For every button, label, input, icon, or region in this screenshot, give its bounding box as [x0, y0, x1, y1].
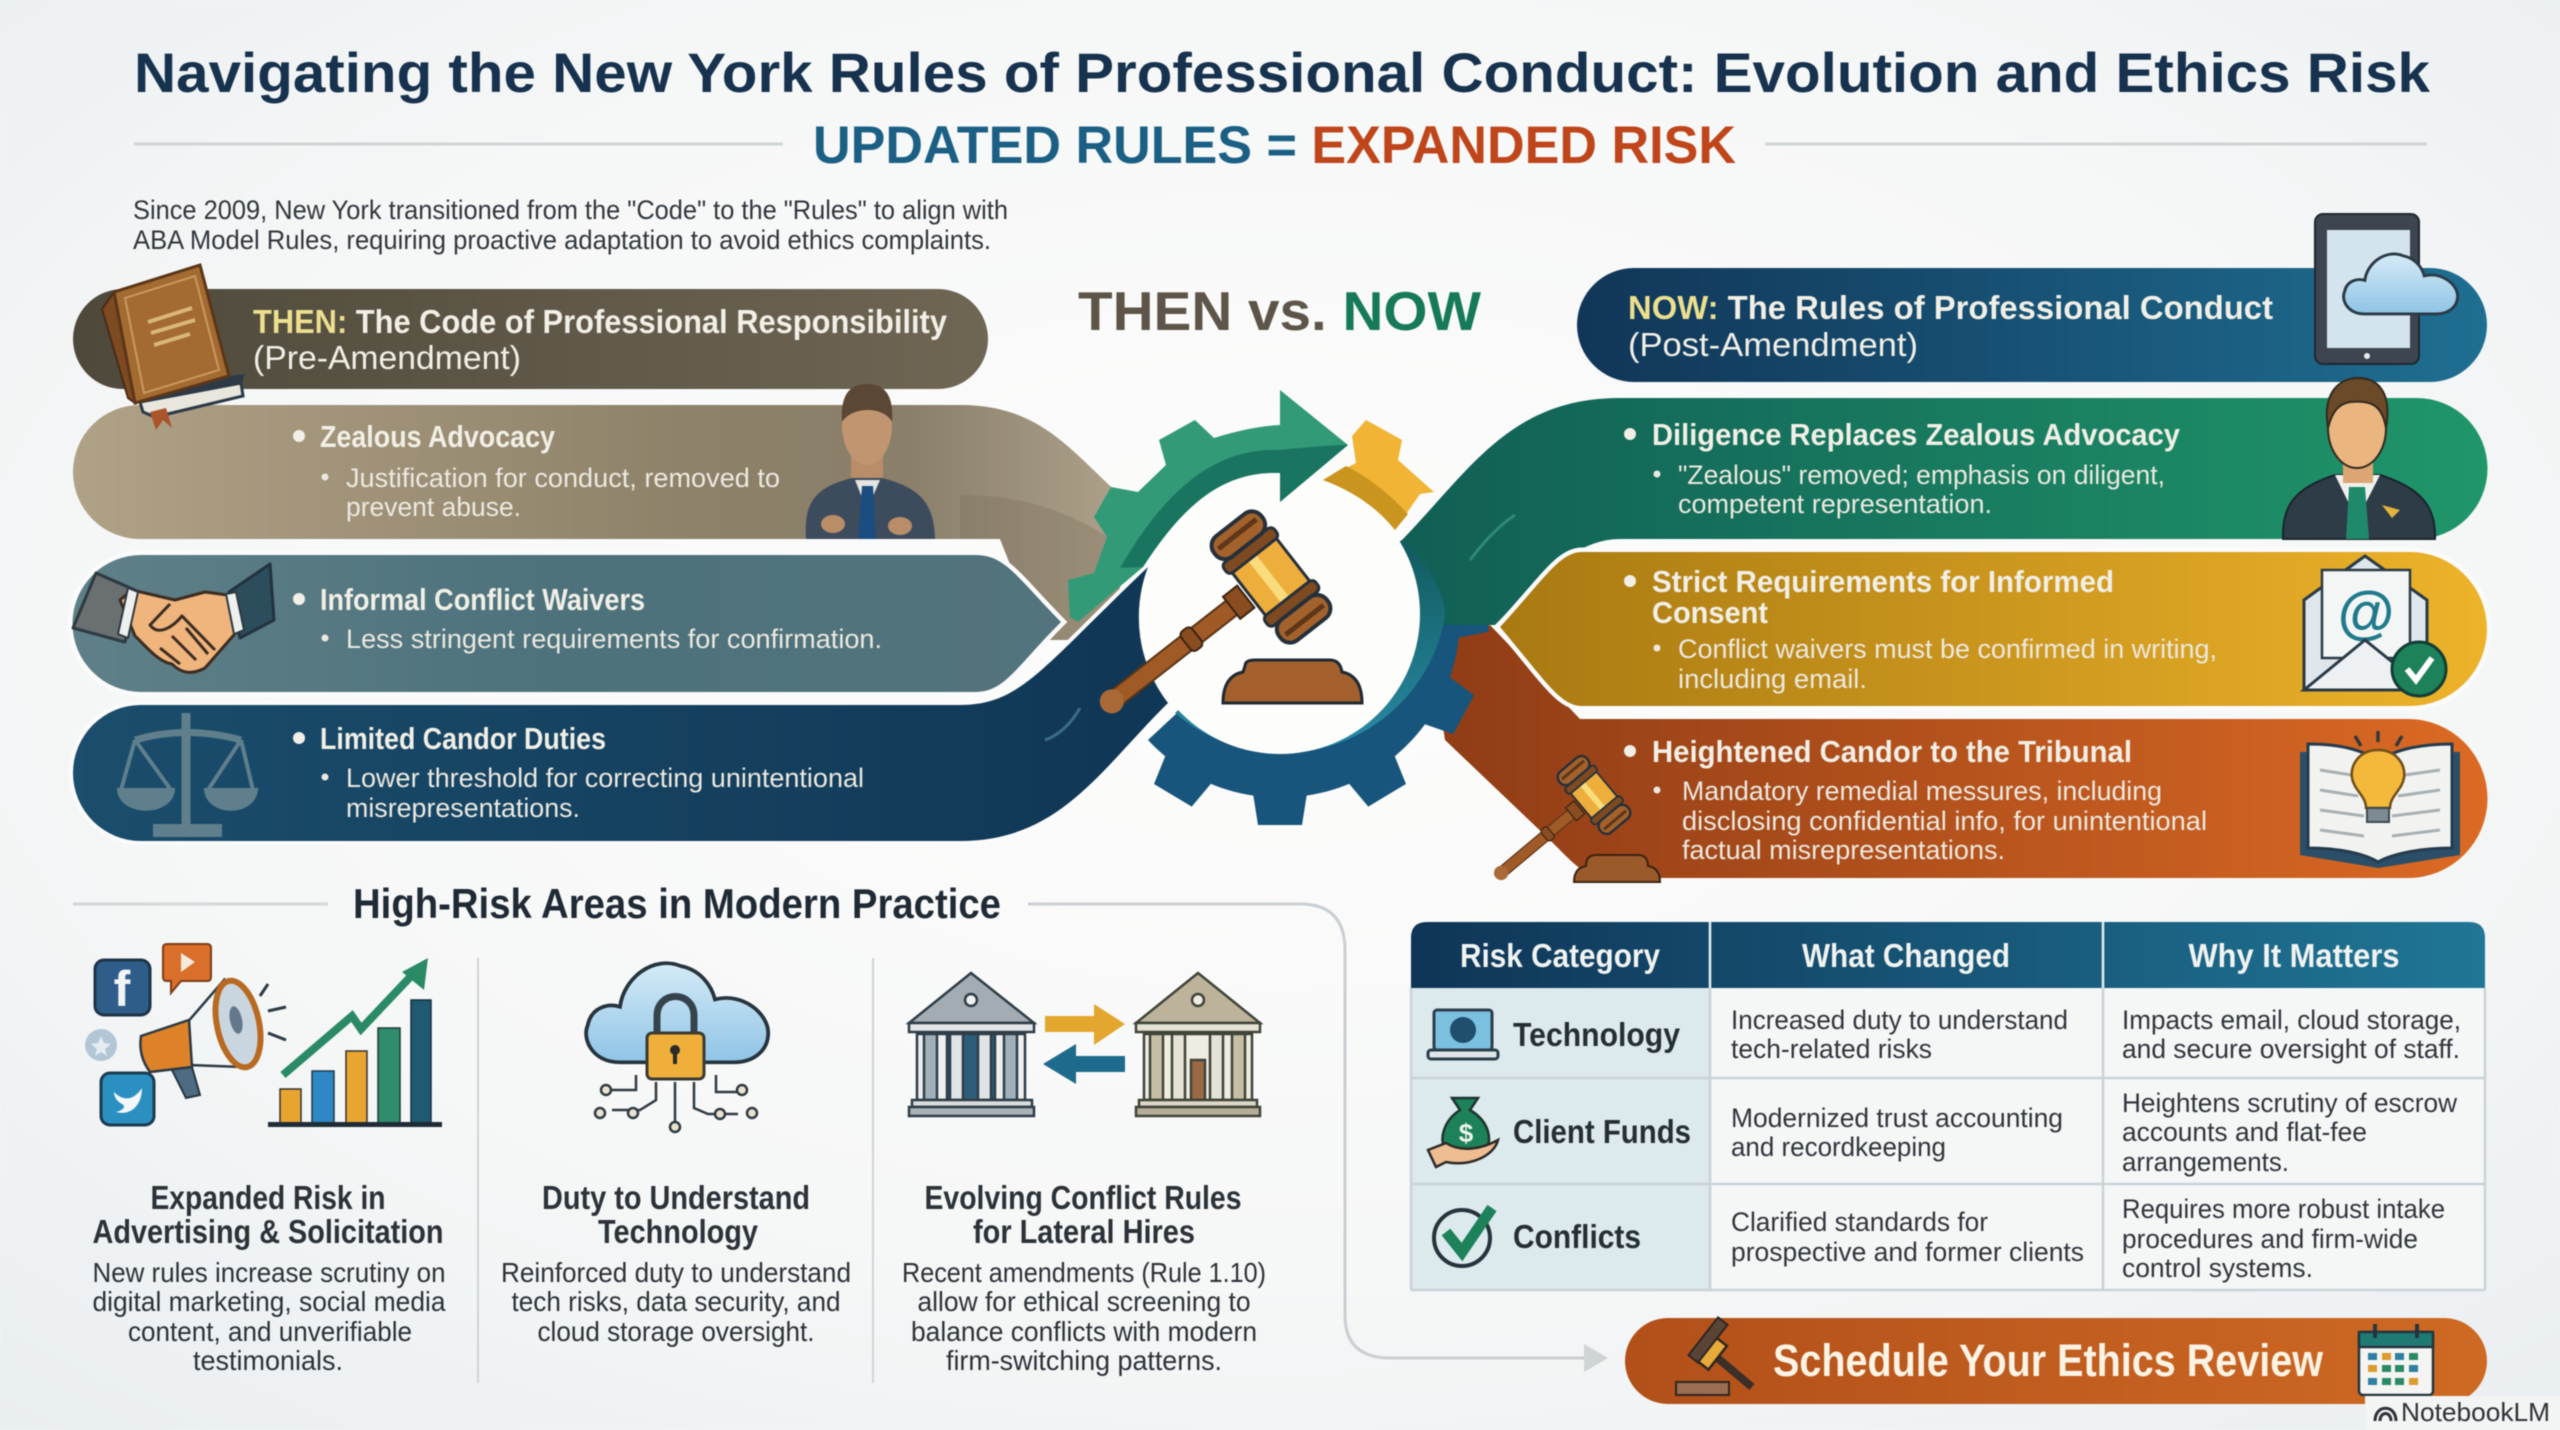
- row: conflicts: prospective and former clients: [1731, 1237, 2084, 1267]
- diligence text: competent representation.: [1678, 489, 1992, 519]
- icon: attorney now: [2283, 378, 2435, 539]
- row: client funds: accounts and flat-fee: [2122, 1117, 2367, 1147]
- row: technology: Technology: [1513, 1016, 1681, 1053]
- heightened candor text: [1624, 734, 2207, 865]
- row: technology: Increased duty to understand: [1731, 1005, 2068, 1035]
- informal conflict text: Informal Conflict Waivers: [320, 582, 645, 617]
- advertising text: content, and unverifiable: [128, 1316, 412, 1347]
- risk table: [1411, 922, 2485, 1290]
- row: client funds: Heightens scrutiny of escrow: [2122, 1088, 2457, 1118]
- panel: high-risk areas frame: [1028, 904, 1584, 1358]
- then header text: THEN: The Code of Professional Responsibility: [253, 303, 948, 340]
- now header text: NOW: The Rules of Professional Conduct: [1628, 289, 2273, 326]
- icon: envelope with check: [2304, 556, 2446, 696]
- panel: now header: (Post-Amendment): [1628, 326, 1918, 363]
- row: client funds: Modernized trust accounting: [1731, 1103, 2063, 1133]
- panel: then header: (Pre-Amendment): [253, 339, 521, 376]
- row: conflicts: control systems.: [2122, 1253, 2313, 1283]
- gear: yellow tooth: [1323, 420, 1434, 530]
- strict requirements text: including email.: [1678, 664, 1867, 694]
- limited candor text: Limited Candor Duties: [320, 721, 606, 756]
- cloud text: Reinforced duty to understand: [501, 1257, 851, 1288]
- panel: informal conflict waivers: [72, 555, 1061, 692]
- heightened candor text: factual misrepresentations.: [1682, 835, 2005, 865]
- icon: small gavel: [1470, 752, 1660, 908]
- zealous advocacy text: [293, 419, 780, 522]
- icon: advertising megaphone and growth chart: f: [114, 961, 131, 1017]
- panel: heightened candor: [1430, 625, 2488, 908]
- lateral hires text: [902, 1179, 1266, 1376]
- zealous advocacy text: Zealous Advocacy: [320, 419, 556, 454]
- advertising text: digital marketing, social media: [92, 1286, 446, 1317]
- icon: law book: [102, 265, 245, 430]
- icon: tablet and cloud: [2315, 214, 2458, 364]
- lateral hires text: Recent amendments (Rule 1.10): [902, 1257, 1266, 1288]
- limited candor text: Lower threshold for correcting unintentional: [346, 763, 864, 793]
- title: Navigating the New York Rules of Professional Conduct: Evolution and Ethics Risk: [134, 41, 2431, 104]
- lateral hires text: for Lateral Hires: [973, 1213, 1195, 1250]
- advertising text: testimonials.: [193, 1345, 343, 1376]
- panel: diligence replaces zealous advocacy: [1402, 378, 2488, 625]
- high-risk heading: High-Risk Areas in Modern Practice: [353, 880, 1001, 927]
- diligence text: [1624, 417, 2181, 519]
- intro text: [133, 195, 1008, 255]
- icon: law firms exchanging lateral hires: [909, 973, 1260, 1116]
- notebooklm watermark: NotebookLM: [2401, 1397, 2550, 1427]
- call to action button: [1625, 1317, 2487, 1404]
- intro text: Since 2009, New York transitioned from the "Code" to the "Rules" to align with: [133, 195, 1008, 225]
- panel: now header: [1577, 268, 2487, 382]
- arrow to call to action: [1584, 1344, 1608, 1372]
- panel: strict requirements: [1500, 552, 2487, 706]
- advertising text: [92, 1179, 446, 1376]
- gear: green arc with arrow: [1068, 390, 1348, 622]
- heightened candor text: Heightened Candor to the Tribunal: [1652, 734, 2132, 769]
- table header: [1411, 922, 2485, 988]
- cloud text: [501, 1179, 851, 1347]
- zealous advocacy text: prevent abuse.: [346, 492, 521, 522]
- row: conflicts: [1434, 1194, 2445, 1283]
- icon: calendar: [2359, 1324, 2433, 1395]
- row: client funds: $: [1459, 1118, 1474, 1148]
- gear: lower blue teeth: [1148, 582, 1489, 825]
- row: conflicts: Clarified standards for: [1731, 1207, 1988, 1237]
- panel: then header: [73, 289, 988, 389]
- cloud text: cloud storage oversight.: [538, 1316, 814, 1347]
- table header: Why It Matters: [2188, 937, 2400, 974]
- intro text: ABA Model Rules, requiring proactive adaptation to avoid ethics complaints.: [133, 225, 991, 255]
- table header: Risk Category: [1460, 937, 1661, 974]
- notebooklm watermark: [2365, 1396, 2560, 1430]
- diligence text: "Zealous" removed; emphasis on diligent,: [1678, 460, 2165, 490]
- row: conflicts: Conflicts: [1513, 1218, 1641, 1255]
- panel: limited candor duties: [73, 567, 1168, 841]
- heightened candor text: disclosing confidential info, for unintentional: [1682, 806, 2207, 836]
- advertising text: Expanded Risk in: [150, 1179, 386, 1216]
- limited candor text: [293, 721, 864, 823]
- icon: scales of justice: [119, 713, 256, 835]
- gear: white centre: [1140, 474, 1420, 754]
- row: client funds: and recordkeeping: [1731, 1132, 1946, 1162]
- row: technology: [1428, 1005, 2461, 1064]
- icon: advertising megaphone and growth chart: [85, 944, 442, 1127]
- row: client funds: arrangements.: [2122, 1147, 2289, 1177]
- row: conflicts: procedures and firm-wide: [2122, 1224, 2418, 1254]
- icon: envelope with check: @: [2338, 580, 2394, 645]
- icon: attorney then: [806, 384, 935, 539]
- strict requirements text: [1624, 564, 2217, 694]
- lateral hires text: firm-switching patterns.: [946, 1345, 1222, 1376]
- panel: zealous advocacy: [73, 384, 1120, 640]
- row: conflicts: Requires more robust intake: [2122, 1194, 2445, 1224]
- icon: open book with bulb: [2300, 731, 2460, 868]
- zealous advocacy text: Justification for conduct, removed to: [346, 463, 780, 493]
- advertising text: New rules increase scrutiny on: [92, 1257, 446, 1288]
- informal conflict text: Less stringent requirements for confirmation.: [346, 624, 882, 654]
- cloud text: tech risks, data security, and: [512, 1286, 840, 1317]
- strict requirements text: Consent: [1652, 595, 1768, 630]
- limited candor text: misrepresentations.: [346, 793, 580, 823]
- lateral hires text: Evolving Conflict Rules: [924, 1179, 1242, 1216]
- heightened candor text: Mandatory remedial messures, including: [1682, 776, 2162, 806]
- row: client funds: Client Funds: [1513, 1113, 1691, 1150]
- strict requirements text: Conflict waivers must be confirmed in writing,: [1678, 634, 2217, 664]
- row: technology: Impacts email, cloud storage,: [2122, 1005, 2461, 1035]
- row: technology: tech-related risks: [1731, 1034, 1932, 1064]
- icon: cloud with padlock: [586, 963, 768, 1132]
- icon: central gavel: [1062, 505, 1362, 761]
- cloud text: Technology: [598, 1213, 759, 1250]
- icon: button gavel: [1676, 1317, 1752, 1395]
- row: client funds: [1428, 1088, 2457, 1177]
- row: technology: and secure oversight of staff.: [2122, 1034, 2460, 1064]
- advertising text: Advertising & Solicitation: [92, 1213, 444, 1250]
- button text: Schedule Your Ethics Review: [1773, 1335, 2324, 1386]
- table header: What Changed: [1802, 937, 2010, 974]
- gear: teal inner ring: [1175, 540, 1445, 753]
- icon: handshake: [73, 564, 274, 672]
- informal conflict text: [293, 582, 882, 654]
- subtitle: UPDATED RULES = EXPANDED RISK: [813, 116, 1736, 175]
- lateral hires text: allow for ethical screening to: [918, 1286, 1250, 1317]
- then vs now heading: THEN vs. NOW: [1078, 280, 1481, 342]
- lateral hires text: balance conflicts with modern: [911, 1316, 1257, 1347]
- strict requirements text: Strict Requirements for Informed: [1652, 564, 2114, 599]
- diligence text: Diligence Replaces Zealous Advocacy: [1652, 417, 2181, 452]
- cloud text: Duty to Understand: [542, 1179, 810, 1216]
